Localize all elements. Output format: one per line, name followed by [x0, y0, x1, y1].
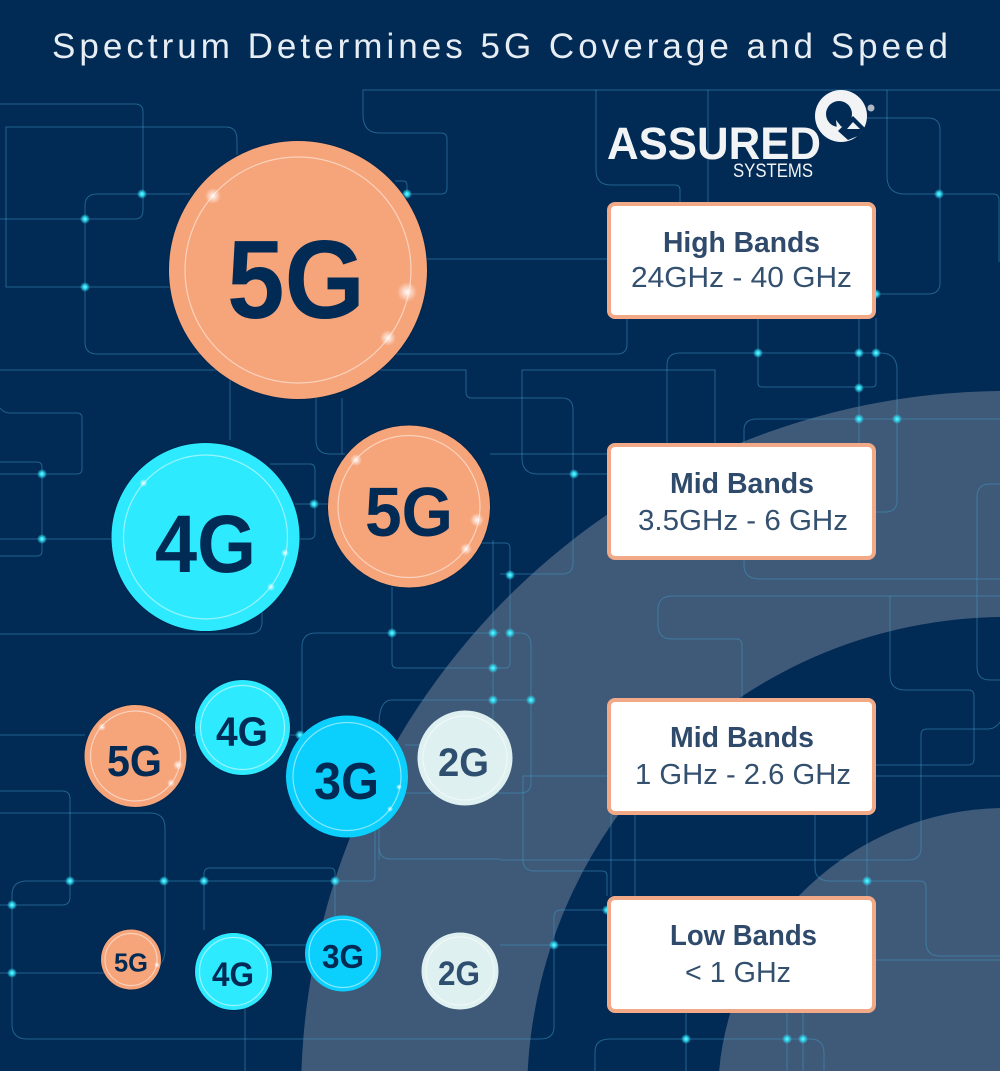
circle: 5G medium: 5G [365, 473, 453, 551]
circle: 4G [194, 932, 273, 1011]
circle: 4G: 4G [216, 708, 268, 754]
circle: 4G: 4G [212, 956, 254, 994]
row: high bands circles [168, 140, 428, 400]
circle: 5G [84, 704, 188, 808]
row: low bands circles [100, 916, 498, 1011]
row: mid bands 3.5-6 GHz circles [110, 424, 491, 632]
circle: 3G: 3G [322, 938, 364, 975]
logo: Assured Systems: ASSURED [607, 118, 821, 169]
label: mid bands 3.5-6 GHz: Mid Bands [670, 468, 814, 500]
circuit nodes [7, 189, 944, 1044]
label: low bands: Low Bands [670, 920, 817, 952]
label: high bands [609, 204, 874, 317]
title: Spectrum Determines 5G Coverage and Speed [52, 27, 948, 66]
label: high bands: 24GHz - 40 GHz [631, 262, 852, 294]
circle: 3G [286, 716, 408, 838]
label: low bands [609, 898, 874, 1011]
circle: 2G [418, 710, 512, 806]
label: mid bands 3.5-6 GHz [609, 445, 874, 558]
circle: 3G: 3G [314, 753, 379, 811]
circle: 5G large: 5G [227, 218, 365, 342]
circle: 4G [110, 442, 300, 632]
circle: 2G: 2G [438, 955, 480, 993]
logo: Assured Systems: SYSTEMS [733, 161, 813, 182]
circle: 5G: 5G [107, 737, 162, 786]
concentric signal arcs [301, 391, 1000, 1071]
circle: 2G [422, 932, 498, 1010]
circle: 4G: 4G [155, 499, 256, 590]
label: mid bands 3.5-6 GHz: 3.5GHz - 6 GHz [638, 505, 848, 537]
circle: 5G large [168, 140, 428, 400]
circle: 4G [194, 679, 291, 776]
label: mid bands 1-2.6 GHz [609, 700, 874, 813]
circle: 5G small [100, 928, 162, 990]
row: mid bands 1-2.6 GHz circles [84, 679, 512, 838]
label: mid bands 1-2.6 GHz: 1 GHz - 2.6 GHz [635, 759, 851, 791]
circle: 3G [305, 916, 381, 992]
label: mid bands 1-2.6 GHz: Mid Bands [670, 722, 814, 754]
circle: 5G small: 5G [114, 948, 148, 978]
circle: 5G medium [327, 424, 491, 588]
label: low bands: < 1 GHz [685, 957, 791, 989]
label: high bands: High Bands [663, 227, 820, 259]
logo: Assured Systems [607, 90, 874, 182]
circle: 2G: 2G [438, 741, 489, 785]
